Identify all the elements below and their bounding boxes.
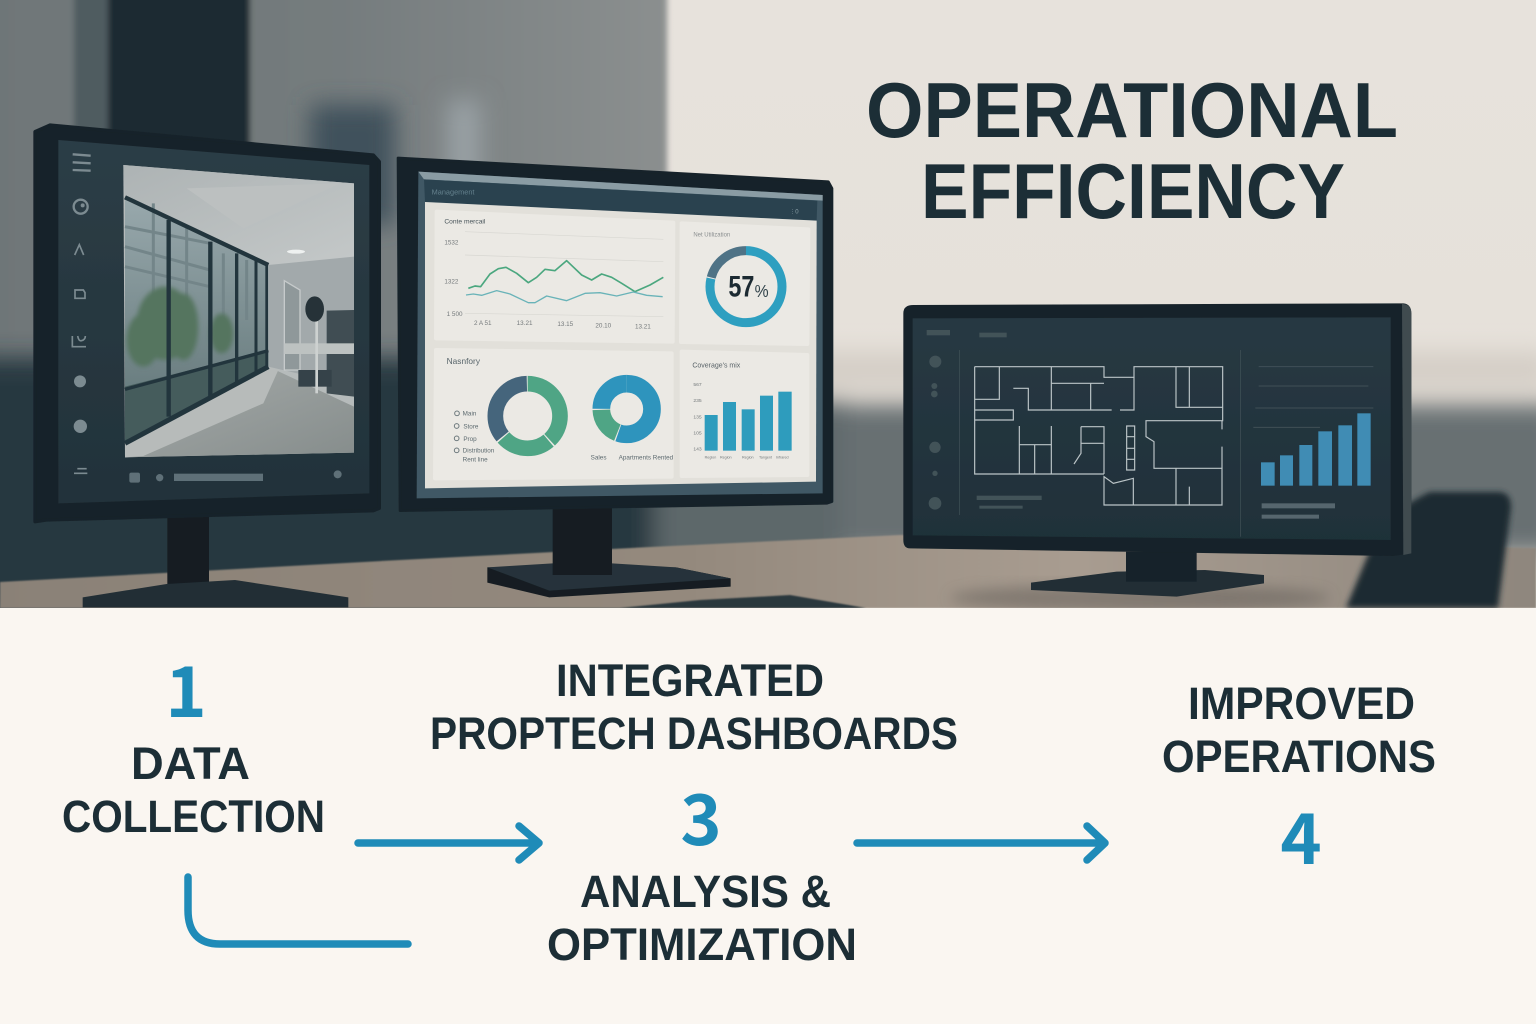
step 4: improved operations (1162, 678, 1436, 885)
monitor bezel (35, 125, 379, 522)
arrow: step 3 to step 4 (857, 826, 1105, 860)
step 2 heading: integrated proptech dashboards: INTEGRATED (556, 655, 824, 706)
card: line chart: 2 A 51 (474, 320, 492, 327)
card: two donuts with legend: Nasnfory (447, 356, 481, 366)
photo background: blurred office (0, 0, 1536, 618)
card: 57% donut: % (755, 281, 769, 301)
title (866, 66, 1398, 235)
card: bar chart: Region (705, 456, 716, 460)
card: two donuts with legend: Prop (463, 436, 477, 443)
card: two donuts with legend: Sales (591, 454, 607, 461)
step 2 heading: integrated proptech dashboards (430, 655, 958, 759)
header bar: Management (432, 188, 474, 197)
step 3: analysis and optimization: 3 (680, 765, 722, 866)
step 1: data collection (62, 637, 325, 842)
card: line chart: 20.10 (595, 322, 612, 329)
card: 57% donut (681, 223, 808, 344)
card: line chart: 13.21 (635, 323, 651, 330)
card: bar chart (682, 352, 807, 476)
sidebar icons (72, 154, 91, 473)
monitor stand (1031, 552, 1264, 597)
sidebar (927, 330, 1241, 537)
step 1: data collection: 1 (165, 637, 207, 738)
card: line chart: 1 500 (447, 311, 463, 318)
header bar (424, 179, 817, 221)
card: two donuts with legend: Distribution (463, 448, 495, 455)
monitor: right, floor plan (903, 303, 1411, 597)
card: bar chart: 567 (693, 382, 702, 388)
screen frame (417, 172, 823, 498)
card: bar chart: 143 (693, 446, 702, 452)
floor plan (975, 367, 1223, 505)
step 2 heading: integrated proptech dashboards: PROPTECH DASHBOARDS (430, 708, 958, 759)
card: two donuts with legend (435, 350, 674, 478)
bottom panel background (0, 608, 1536, 1024)
dark screen (913, 317, 1391, 540)
card: line chart: Conte mercail (444, 218, 486, 225)
step 1: data collection: COLLECTION (62, 791, 325, 842)
monitor: left, interior camera view (35, 125, 379, 607)
card: line chart: 13.21 (517, 320, 533, 327)
room furniture (284, 281, 354, 397)
step 4: improved operations: OPERATIONS (1162, 731, 1436, 782)
card: line chart (436, 212, 673, 342)
step 3: analysis and optimization (547, 765, 857, 970)
bar chart (1253, 367, 1373, 519)
card: bar chart: Region (742, 456, 754, 460)
arrow: step 1 to step 3 (358, 826, 539, 860)
card: bar chart: 105 (693, 430, 702, 436)
title: OPERATIONAL (866, 66, 1398, 154)
step 1: data collection: DATA (131, 738, 250, 789)
card: two donuts with legend: Rent line (463, 457, 488, 464)
step 3: analysis and optimization: ANALYSIS & (580, 866, 831, 917)
bottom control bar (129, 470, 342, 483)
card: 57% donut: 57 (728, 270, 754, 303)
step 4: improved operations: IMPROVED (1188, 678, 1415, 729)
card: bar chart: 135 (693, 414, 702, 420)
dashboard surface (425, 202, 817, 488)
monitor: centre, analytics dashboard (398, 158, 832, 597)
card: bar chart: Tangent (759, 456, 772, 460)
card: bar chart: Region (720, 456, 732, 460)
card: 57% donut: Net Utilization (693, 233, 730, 239)
monitor bezel (398, 158, 832, 511)
room camera view (123, 165, 354, 457)
desk surface (0, 535, 1536, 608)
sidebar and screen frame (58, 140, 369, 503)
keyboard edge (620, 595, 866, 608)
card: two donuts with legend: Store (463, 424, 479, 431)
connector: curved line under step 1 (188, 877, 408, 944)
monitor stand (487, 507, 731, 597)
card: two donuts with legend: Main (463, 411, 477, 418)
card: two donuts with legend: Apartments Rented (619, 454, 674, 461)
chair silhouette (1346, 492, 1511, 608)
card: bar chart: Coverage's mix (692, 362, 741, 369)
monitor bezel (903, 303, 1411, 556)
card: line chart: 13.15 (557, 321, 574, 328)
window wall with tree view (125, 197, 268, 443)
card: line chart: 1322 (444, 278, 459, 285)
step 4: improved operations: 4 (1280, 784, 1322, 885)
header bar: ⵗ 0 (792, 209, 799, 215)
title: EFFICIENCY (921, 147, 1345, 235)
card: bar chart: Infrared (776, 456, 789, 460)
monitor stand (83, 517, 348, 607)
step 3: analysis and optimization: OPTIMIZATION (547, 919, 857, 970)
card: bar chart: 235 (693, 398, 702, 404)
card: line chart: 1532 (444, 240, 459, 247)
